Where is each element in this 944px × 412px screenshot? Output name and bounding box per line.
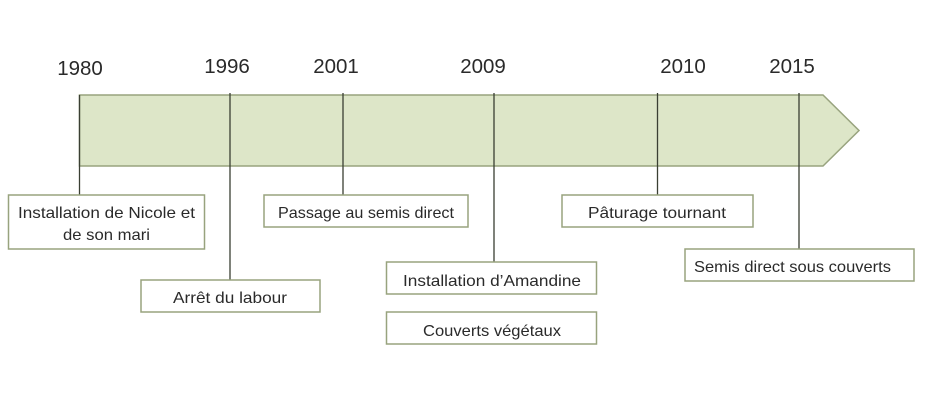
- event: Pâturage tournant: [562, 195, 753, 227]
- year: 2015: 2015: [769, 55, 815, 78]
- connector: 2009: [493, 93, 495, 262]
- event: Installation d’Amandine: Installation d’Amandine: [403, 273, 581, 290]
- event: Semis direct sous couverts: [685, 249, 914, 281]
- event: Semis direct sous couverts: Semis direct sous couverts: [694, 259, 891, 276]
- year: 1996: 1996: [204, 55, 250, 78]
- event: Couverts végétaux: [386, 312, 596, 344]
- event: Arrêt du labour: [141, 280, 320, 312]
- event: Arrêt du labour: Arrêt du labour: [173, 290, 288, 307]
- year: 2001: 2001: [313, 55, 359, 78]
- connector: 2001: [342, 93, 344, 195]
- event: Passage au semis direct: Passage au semis direct: [278, 205, 455, 222]
- event: Installation d’Amandine: [386, 262, 596, 294]
- timeline arrow: [80, 95, 859, 166]
- year: 1980: 1980: [57, 57, 103, 80]
- year: 2010: 2010: [660, 55, 706, 78]
- year: 2009: 2009: [460, 55, 506, 78]
- event: Couverts végétaux: Couverts végétaux: [423, 323, 561, 340]
- event: Installation de Nicole et de son mari: de son mari: [63, 227, 150, 244]
- event: Installation de Nicole et de son mari: [8, 195, 204, 249]
- connector: 2010: [656, 93, 658, 195]
- event: Installation de Nicole et de son mari: Installation de Nicole et: [18, 205, 196, 222]
- connector: 1980: [78, 95, 80, 195]
- connector: 1996: [229, 93, 231, 280]
- event: Pâturage tournant: Pâturage tournant: [588, 205, 727, 222]
- connector: 2015: [798, 93, 800, 249]
- event: Passage au semis direct: [264, 195, 468, 227]
